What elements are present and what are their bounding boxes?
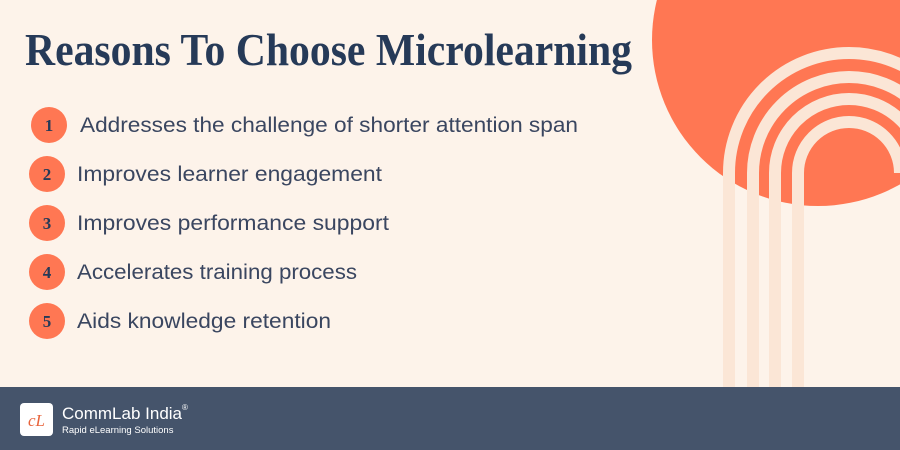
item 3 <box>29 205 389 241</box>
item 2: 2 <box>43 165 51 184</box>
item 2 <box>29 156 382 192</box>
decoration: orange circle with arches <box>652 0 900 387</box>
item 1: 1 <box>45 116 53 135</box>
item 1 <box>31 107 578 143</box>
item 3: Improves performance support <box>77 212 389 235</box>
footer bar <box>0 387 900 450</box>
item 5 <box>29 303 331 339</box>
item 3: 3 <box>43 214 51 233</box>
logo text: ® <box>182 403 188 412</box>
logo icon: cL <box>28 411 45 430</box>
item 4: 4 <box>43 263 52 282</box>
item 4: Accelerates training process <box>77 261 357 284</box>
title: Reasons To Choose Microlearning <box>25 24 632 75</box>
list <box>29 107 578 339</box>
logo icon <box>20 403 53 436</box>
item 4 <box>29 254 357 290</box>
logo text: CommLab India <box>62 404 183 423</box>
logo text: Rapid eLearning Solutions <box>62 425 174 436</box>
logo text <box>62 403 188 436</box>
item 2: Improves learner engagement <box>77 163 382 186</box>
item 5: Aids knowledge retention <box>77 310 331 333</box>
item 1: Addresses the challenge of shorter attention span <box>80 114 578 137</box>
item 5: 5 <box>43 312 51 331</box>
